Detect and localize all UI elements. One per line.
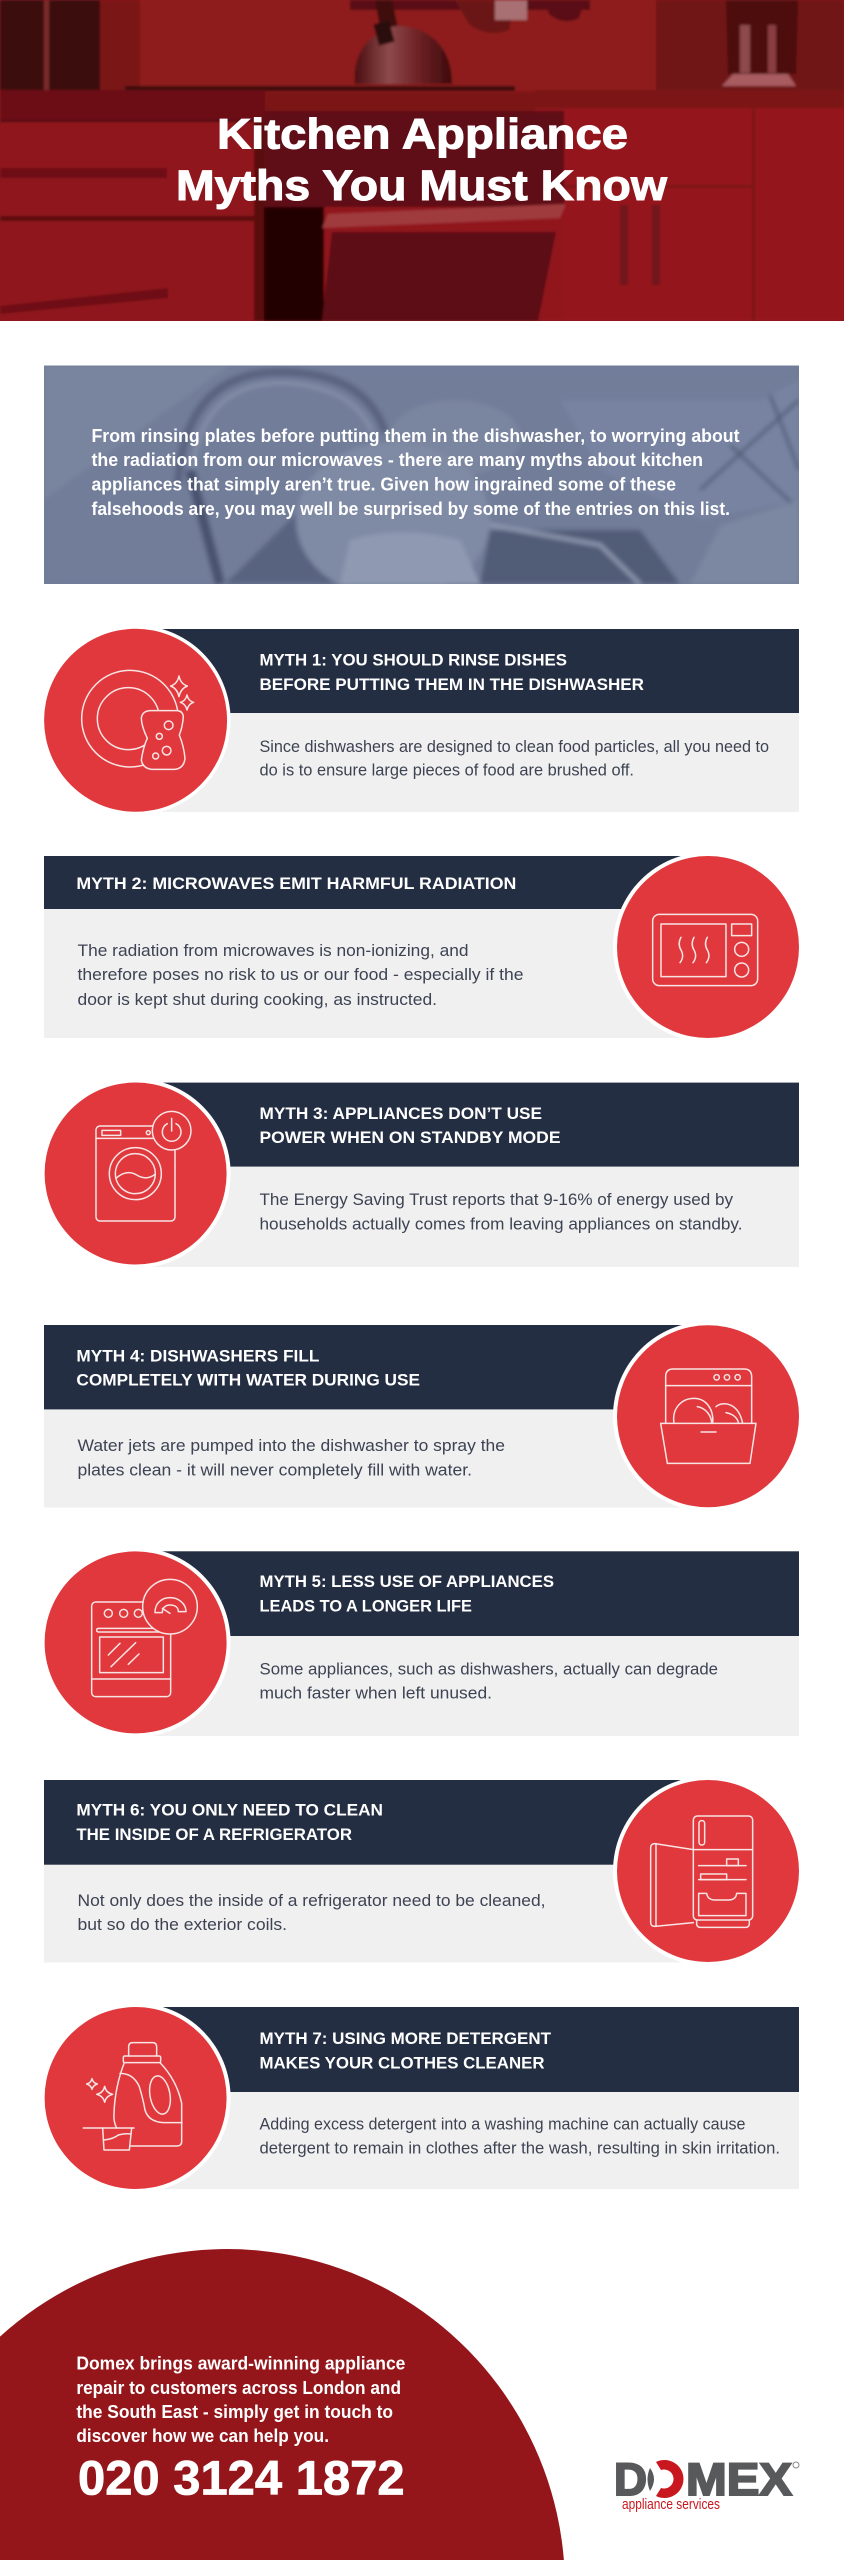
myth 2 text [78, 942, 524, 1009]
myth 3 heading: MYTH 3: APPLIANCES DON’T USE [260, 1104, 542, 1123]
footer text: Domex brings award-winning appliance [76, 2354, 405, 2374]
footer text: discover how we can help you. [76, 2426, 329, 2446]
myth 4 text: plates clean - it will never completely fill with water. [78, 1461, 472, 1479]
myth 1 heading: MYTH 1: YOU SHOULD RINSE DISHES [260, 651, 567, 670]
myth 5 text: much faster when left unused. [260, 1685, 492, 1703]
myth 3 text: households actually comes from leaving appliances on standby. [260, 1216, 742, 1234]
title: Kitchen Appliance [217, 110, 628, 158]
title: Myths You Must Know [176, 162, 668, 210]
myth 6 text: Not only does the inside of a refrigerator need to be cleaned, [78, 1892, 546, 1910]
intro text [92, 426, 740, 519]
myth 2 heading: MYTH 2: MICROWAVES EMIT HARMFUL RADIATION [76, 874, 516, 893]
icon: microwave [653, 914, 758, 986]
myth 7 heading: MYTH 7: USING MORE DETERGENT [260, 2029, 552, 2048]
myth 6 heading: THE INSIDE OF A REFRIGERATOR [76, 1825, 352, 1844]
myth 3 heading: POWER WHEN ON STANDBY MODE [260, 1128, 560, 1147]
panel: myth 1 [41, 625, 799, 815]
myth 4 text: Water jets are pumped into the dishwasher to spray the [78, 1437, 505, 1455]
myth 5 heading [260, 1572, 554, 1616]
myth 2 text: door is kept shut during cooking, as instructed. [78, 991, 437, 1009]
intro panel with dishwashing photo [44, 365, 799, 598]
panel: myth 4 [44, 1321, 803, 1511]
myth 7 heading: MAKES YOUR CLOTHES CLEANER [260, 2054, 544, 2073]
icon: dishwasher [661, 1369, 756, 1463]
intro text: From rinsing plates before putting them in the dishwasher, to worrying about [92, 426, 740, 446]
logo: Domex appliance services: D [614, 2454, 647, 2505]
myth 1 text [260, 738, 769, 780]
panel: myth 5 [41, 1547, 799, 1737]
footer text: repair to customers across London and [76, 2378, 401, 2398]
myth 5 text [260, 1660, 718, 1703]
myth 5 heading: LEADS TO A LONGER LIFE [260, 1597, 472, 1616]
myth 6 heading: MYTH 6: YOU ONLY NEED TO CLEAN [76, 1801, 383, 1820]
panel: myth 6 [44, 1776, 803, 1966]
icon: detergent bottle and cup [83, 2043, 182, 2150]
title [176, 110, 668, 210]
panel: myth 3 [41, 1078, 799, 1268]
logo: Domex appliance services: MEX [686, 2454, 792, 2505]
myth 7 heading [260, 2029, 552, 2073]
phone number: 020 3124 1872 [78, 2452, 405, 2506]
icon: open refrigerator [651, 1816, 753, 1927]
myth 7 text: Adding excess detergent into a washing machine can actually cause [260, 2116, 746, 2134]
header banner: red kitchen photo [0, 0, 844, 321]
myth 6 text: but so do the exterior coils. [78, 1916, 287, 1934]
myth 2 text: The radiation from microwaves is non-ionizing, and [78, 942, 468, 960]
myth 1 heading: BEFORE PUTTING THEM IN THE DISHWASHER [260, 675, 644, 694]
myth 1 text: do is to ensure large pieces of food are brushed off. [260, 762, 634, 780]
panel: myth 2 [44, 852, 803, 1042]
myth 5 text: Some appliances, such as dishwashers, actually can degrade [260, 1660, 718, 1678]
intro text: falsehoods are, you may well be surprised by some of the entries on this list. [92, 499, 730, 519]
footer text: the South East - simply get in touch to [76, 2402, 393, 2422]
logo: Domex appliance services: appliance services [622, 2496, 720, 2513]
myth 6 heading [76, 1801, 383, 1844]
myth 4 heading: COMPLETELY WITH WATER DURING USE [76, 1371, 420, 1390]
myth 3 text [260, 1191, 742, 1234]
panel: myth 7 [41, 2003, 799, 2193]
icon: oven with gauge [92, 1579, 197, 1697]
myth 3 text: The Energy Saving Trust reports that 9-16% of energy used by [260, 1191, 734, 1209]
icon: washing machine with power button [96, 1111, 191, 1221]
myth 5 heading: MYTH 5: LESS USE OF APPLIANCES [260, 1572, 554, 1591]
myth 7 text [260, 2116, 780, 2158]
myth 2 text: therefore poses no risk to us or our food - especially if the [78, 966, 524, 984]
myth 1 heading [260, 651, 644, 694]
myth 7 text: detergent to remain in clothes after the wash, resulting in skin irritation. [260, 2140, 780, 2158]
intro text: appliances that simply aren’t true. Given how ingrained some of these [92, 475, 676, 495]
myth 1 text: Since dishwashers are designed to clean food particles, all you need to [260, 738, 769, 756]
footer text [76, 2354, 405, 2446]
myth 4 heading [76, 1347, 420, 1390]
myth 6 text [78, 1892, 546, 1934]
myth 4 heading: MYTH 4: DISHWASHERS FILL [76, 1347, 319, 1366]
footer: red semicircle call to action [0, 2249, 564, 2560]
myth 4 text [78, 1437, 505, 1479]
intro text: the radiation from our microwaves - there are many myths about kitchen [92, 450, 703, 470]
icon: plate and sponge [82, 670, 194, 769]
myth 3 heading [260, 1104, 560, 1147]
logo: Domex appliance services [614, 2454, 799, 2513]
